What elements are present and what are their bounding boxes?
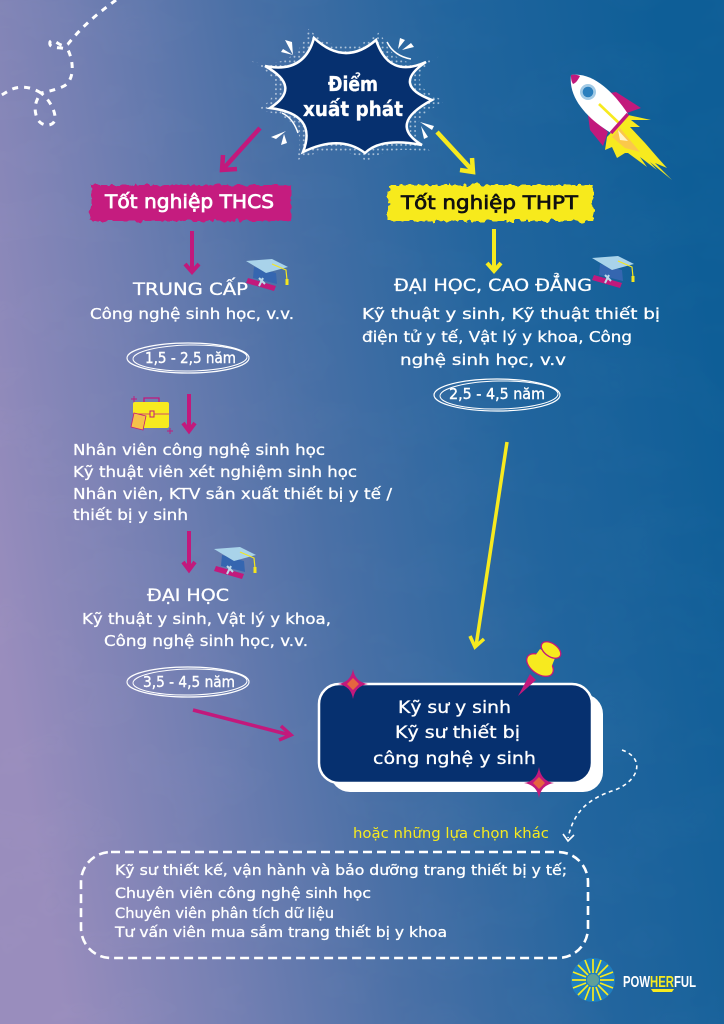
text: job list: Kỹ thuật viên xét nghiệm sinh học [73,463,357,481]
heading: TRUNG CẤP: TRUNG CẤP [132,276,248,300]
text: job list: Nhân viên, KTV sản xuất thiết bị y tế / [73,485,393,503]
icon: push pin [518,638,564,696]
label: Tốt nghiệp THCS: Tốt nghiệp THCS [104,191,274,213]
icon: rocket [571,75,672,180]
flame [605,115,672,180]
icon: graduation cap 2 [214,547,256,579]
panel: other careers: Kỹ sư thiết kế, vận hành và bảo dưỡng trang thiết bị y tế; [115,862,567,879]
duration: 3,5 - 4,5 năm: 3,5 - 4,5 năm [143,673,235,691]
arrow: start to THPT [437,132,473,172]
nose [571,75,580,84]
panel body [319,684,592,783]
starburst [265,38,432,153]
arrow: start to THCS [222,128,260,170]
stripe [599,104,620,124]
text: university majors: Kỹ thuật y sinh, Vật lý y khoa, [82,610,331,628]
text: university majors [82,610,331,650]
fins [588,92,641,146]
arrow: Trung cấp to jobs [183,394,195,431]
text: college majors [362,305,660,369]
base band [611,114,628,133]
duration: 2,5 - 4,5 năm: 2,5 - 4,5 năm [449,385,545,403]
body [571,75,628,133]
arrow: THCS to Trung cấp [185,231,199,272]
text: other choices: hoặc những lựa chọn khác [353,826,549,842]
label: Tốt nghiệp THCS [91,185,291,221]
text: university majors: Công nghệ sinh học, v.v. [104,632,308,650]
panel text: Kỹ sư y sinh [398,698,511,718]
sparkle right [524,767,554,798]
label: Tốt nghiệp THPT [388,185,593,221]
text: college majors: Kỹ thuật y sinh, Kỹ thuật thiết bị [362,305,660,323]
start badge: Điểm xuất phát: xuất phát [303,97,403,121]
panel: engineer outcome: công nghệ y sinh [373,749,536,769]
logo: Powherful [571,958,696,1002]
duration: 2,5 - 4,5 năm [434,379,560,411]
text: Công nghệ sinh học: Công nghệ sinh học, v.v. [90,305,294,323]
icon: briefcase [131,396,173,434]
text: college majors: điện tử y tế, Vật lý y khoa, Công [362,328,632,346]
arrow: Đại học, Cao đẳng to engineer [470,442,507,647]
window [580,84,596,100]
icon: graduation cap 1 [246,259,288,291]
duration: 1,5 - 2,5 năm [127,343,249,373]
panel shadow [330,694,603,792]
burst arcs [282,42,411,133]
sparkle left [338,669,368,699]
duration: 3,5 - 4,5 năm [127,667,249,697]
duration: 1,5 - 2,5 năm: 1,5 - 2,5 năm [145,349,236,367]
arrow: Đại học to engineer [193,710,291,740]
text: job list: thiết bị y sinh [73,506,188,524]
arrow: THPT to Đại học, Cao đẳng [487,229,501,271]
text: job list: Nhân viên công nghệ sinh học [73,441,325,459]
logo wordmark: POWHERFUL [623,974,696,991]
panel: other careers: Chuyên viên phân tích dữ liệu [115,906,334,922]
panel: other careers: Tư vấn viên mua sắm trang thiết bị y khoa [114,924,447,941]
panel: other careers: Chuyên viên công nghệ sinh học [115,886,371,902]
arrow: dashed curve to other choices [563,750,637,841]
heading: ĐẠI HỌC, CAO ĐẲNG: ĐẠI HỌC, CAO ĐẲNG [394,272,592,296]
label: Tốt nghiệp THPT: Tốt nghiệp THPT [400,192,578,214]
start badge: Điểm xuất phát [252,29,445,162]
panel: other careers [81,852,588,958]
badge title: Điểm [328,72,378,96]
dashed flight path decoration [0,0,116,125]
burst ticks [271,38,434,145]
logo sunburst [571,958,615,1002]
panel: engineer outcome: Kỹ sư thiết bị [395,722,520,743]
icon: graduation cap 3 [592,256,634,288]
text: college majors: nghệ sinh học, v.v [400,351,566,369]
halftone halo [252,29,445,162]
heading: ĐẠI HỌC: ĐẠI HỌC [147,586,229,606]
panel: engineer outcome [319,669,603,798]
arrow: jobs to Đại học [183,531,195,570]
text: job list [73,441,393,524]
